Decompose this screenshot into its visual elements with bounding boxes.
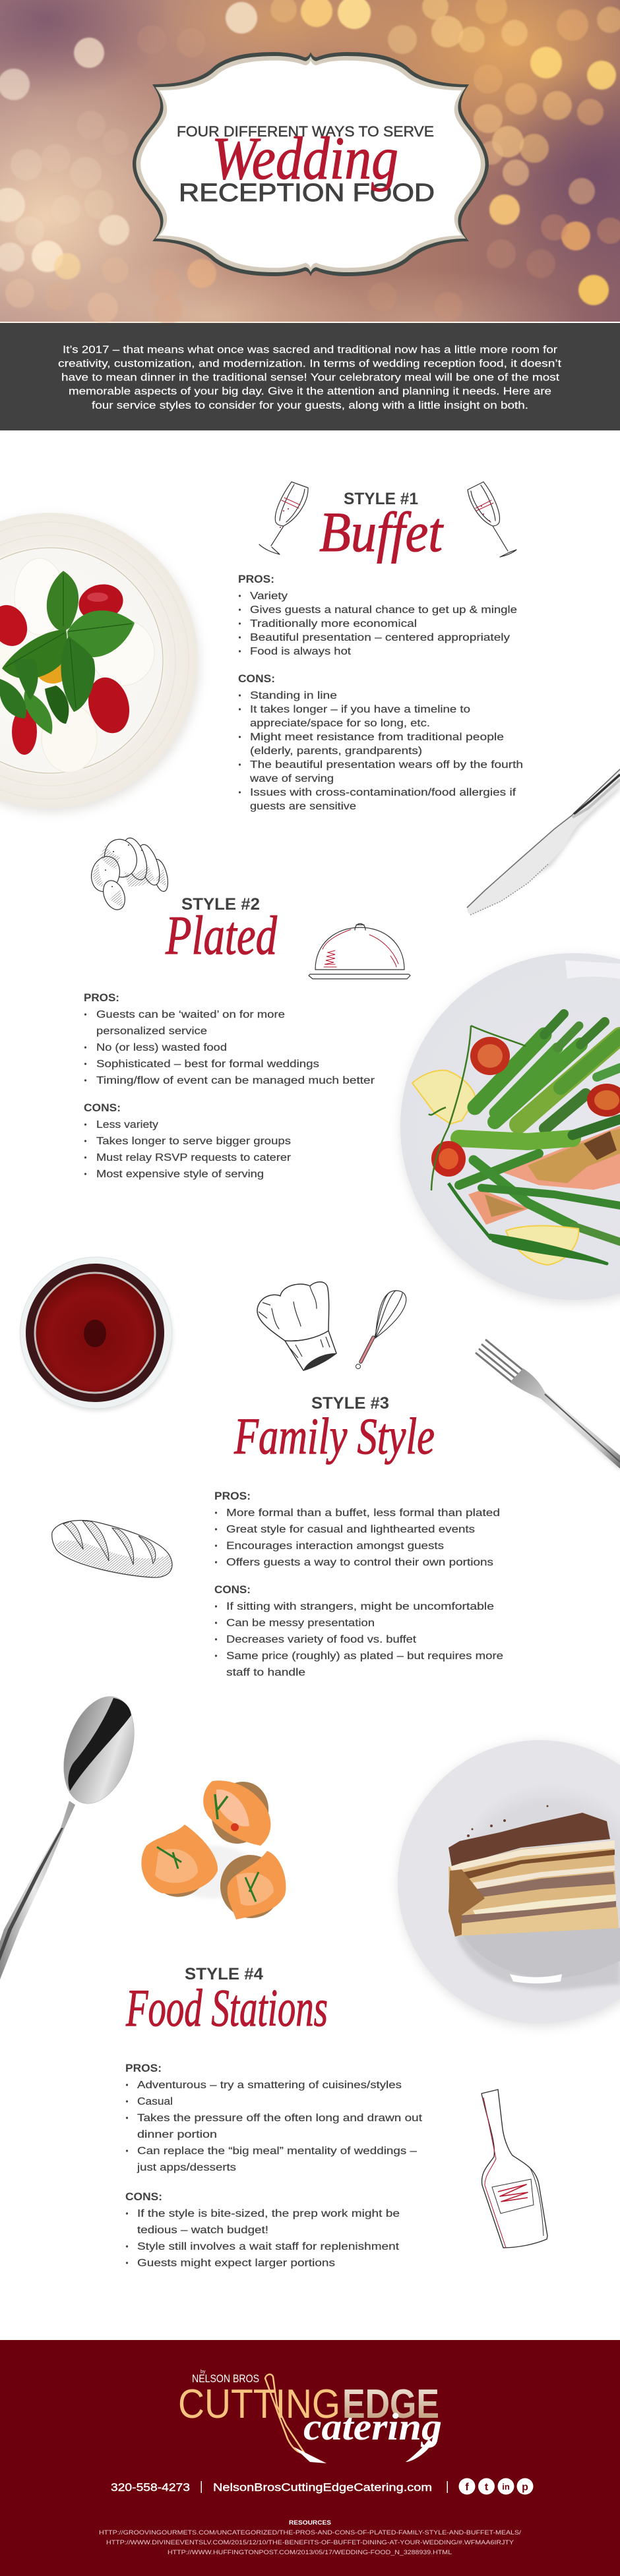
- image: fork: [476, 1340, 620, 1471]
- image: salmon canapes: [141, 1772, 286, 1923]
- icons: social media: t: [485, 2482, 489, 2493]
- heading: style 3 family style: STYLE #3: [311, 1394, 389, 1413]
- text block: style 3 pros and cons: Offers guests a way to control their own portions: [226, 1557, 493, 1568]
- contact line: NelsonBrosCuttingEdgeCatering.com: [213, 2481, 432, 2494]
- text block: style 2 pros and cons: CONS:: [84, 1102, 121, 1114]
- logo: Nelson Bros Cutting Edge Catering: by: [201, 2370, 206, 2374]
- text block: style 4 pros and cons: Guests might expect larger portions: [137, 2258, 335, 2269]
- icon: bread loaf: [52, 1520, 172, 1577]
- text block: style 2 pros and cons: PROS:: [84, 992, 119, 1004]
- text block: style 1 pros and cons: Standing in line: [250, 690, 337, 701]
- text block: style 1 pros and cons: Variety: [250, 591, 288, 602]
- text block: style 3 pros and cons: CONS:: [214, 1584, 251, 1596]
- text block: style 2 pros and cons: personalized service: [96, 1026, 207, 1037]
- text block: style 1 pros and cons: The beautiful presentation wears off by the fourth: [250, 759, 523, 771]
- text block: style 1 pros and cons: It takes longer – if you have a timeline to: [250, 704, 470, 715]
- icon: left champagne glass: [259, 482, 308, 554]
- text block: style 2 pros and cons: Sophisticated – best for formal weddings: [96, 1059, 319, 1070]
- logo: Nelson Bros Cutting Edge Catering: NELSON BROS: [192, 2372, 259, 2385]
- heading: style 3 family style: Family Style: [233, 1407, 435, 1465]
- asparagus: [459, 1014, 620, 1242]
- text block: style 4 pros and cons: dinner portion: [137, 2129, 217, 2140]
- icons: social media: p: [522, 2482, 528, 2493]
- icons: social media: f: [465, 2482, 469, 2493]
- logo: Nelson Bros Cutting Edge Catering: catering: [303, 2405, 442, 2448]
- text block: style 2 pros and cons: Must relay RSVP requests to caterer: [96, 1152, 291, 1163]
- image: red wine glass from above: [20, 1257, 173, 1411]
- text block: style 1 pros and cons: (elderly, parents, grandparents): [250, 746, 422, 757]
- icons: social media: [459, 2478, 533, 2494]
- heading: style 4 food stations: Food Stations: [125, 1979, 328, 2037]
- text block: style 1 pros and cons: appreciate/space for so long, etc.: [250, 718, 430, 729]
- text block: style 1 pros and cons: Might meet resistance from traditional people: [250, 732, 504, 743]
- logo: Nelson Bros Cutting Edge Catering: EDGE: [342, 2382, 439, 2427]
- text block: resources: HTTP://GROOVINGOURMETS.COM/UNCATEGORIZED/THE-PROS-AND-CONS-OF-PLATED-FAMILY-STYLE-AND-BUFFET-MEALS/: [99, 2529, 522, 2536]
- text block: style 4 pros and cons: [125, 2063, 423, 2269]
- text block: resources: RESOURCES: [289, 2519, 331, 2526]
- text block: style 3 pros and cons: Can be messy presentation: [226, 1618, 375, 1629]
- frame: scalloped title plaque: [133, 52, 489, 276]
- image: caprese plate: [0, 513, 199, 812]
- heading: style 2 plated: [165, 895, 278, 966]
- title: heading text: FOUR DIFFERENT WAYS TO SERVE: [177, 123, 434, 140]
- text block: style 1 pros and cons: Traditionally more economical: [250, 618, 417, 629]
- text block: style 3 pros and cons: Great style for casual and lighthearted events: [226, 1524, 475, 1535]
- text block: style 1 pros and cons: guests are sensitive: [250, 801, 356, 812]
- image: spoon: [0, 1687, 147, 1979]
- text block: style 2 pros and cons: Timing/flow of event can be managed much better: [96, 1075, 375, 1086]
- icon: bottle: [481, 2090, 547, 2248]
- heading: style 1 buffet: STYLE #1: [344, 490, 418, 508]
- bokeh lights: [0, 0, 620, 324]
- text block: resources: [99, 2519, 522, 2556]
- title: heading text: RECEPTION FOOD: [179, 179, 435, 207]
- panel: hero bokeh banner: [0, 0, 620, 389]
- text block: style 3 pros and cons: staff to handle: [226, 1667, 305, 1678]
- contact line: [111, 2481, 448, 2494]
- text block: style 4 pros and cons: Adventurous – try a smattering of cuisines/styles: [137, 2080, 402, 2091]
- text block: resources: HTTP://WWW.HUFFINGTONPOST.COM/2013/05/17/WEDDING-FOOD_N_3288939.HTML: [168, 2549, 452, 2556]
- logo: Nelson Bros Cutting Edge Catering: CUTTING: [178, 2382, 340, 2427]
- heading: style 2 plated: STYLE #2: [181, 895, 260, 914]
- text block: style 3 pros and cons: More formal than a buffet, less formal than plated: [226, 1508, 500, 1519]
- image: cake slice plate: [398, 1740, 620, 2027]
- text block: style 4 pros and cons: CONS:: [125, 2191, 162, 2203]
- text block: style 2 pros and cons: Takes longer to serve bigger groups: [96, 1136, 291, 1147]
- text block: style 3 pros and cons: Encourages interaction amongst guests: [226, 1540, 444, 1552]
- text block: style 1 pros and cons: Gives guests a natural chance to get up & mingle: [250, 604, 517, 616]
- text block: style 4 pros and cons: just apps/desserts: [137, 2162, 236, 2173]
- icons: social media: in: [502, 2482, 510, 2492]
- text block: style 1 pros and cons: Food is always hot: [250, 646, 352, 657]
- arugula and lemon: [429, 1026, 607, 1265]
- text block: style 3 pros and cons: Same price (roughly) as plated – but requires more: [226, 1651, 503, 1662]
- panel: intro text band: have to mean dinner in the traditional sense! Your celebratory meal will be one of the most: [61, 372, 560, 384]
- text block: style 4 pros and cons: Takes the pressure off the often long and drawn out: [137, 2113, 423, 2124]
- text block: style 1 pros and cons: CONS:: [238, 673, 275, 685]
- panel: intro text band: creativity, customization, and modernization. In terms of wedding reception food, it doesn’t: [58, 359, 562, 369]
- icon: croissant sketch: [88, 835, 171, 913]
- text block: style 4 pros and cons: Can replace the “big meal” mentality of weddings –: [137, 2146, 417, 2157]
- text block: style 1 pros and cons: Issues with cross-contamination/food allergies if: [250, 787, 516, 798]
- text block: style 4 pros and cons: Casual: [137, 2096, 173, 2107]
- title: heading text: Wedding: [212, 125, 398, 192]
- panel: intro text band: [0, 323, 620, 430]
- text block: style 3 pros and cons: PROS:: [214, 1490, 251, 1502]
- text block: style 1 pros and cons: [238, 573, 523, 812]
- text block: style 2 pros and cons: Most expensive style of serving: [96, 1169, 264, 1180]
- image: salmon and asparagus plate: [400, 953, 620, 1303]
- heading: style 4 food stations: STYLE #4: [185, 1965, 263, 1983]
- text block: style 2 pros and cons: [84, 992, 375, 1180]
- logo: Nelson Bros Cutting Edge Catering: [178, 2370, 442, 2463]
- heading: style 2 plated: Plated: [165, 905, 278, 966]
- image: table knife: [467, 769, 620, 918]
- icon: whisk: [356, 1291, 406, 1368]
- icon: right champagne glass: [468, 482, 516, 557]
- text block: style 3 pros and cons: Decreases variety of food vs. buffet: [226, 1634, 417, 1645]
- text block: resources: HTTP://WWW.DIVINEEVENTSLV.COM/2015/12/10/THE-BENEFITS-OF-BUFFET-DINING-AT-YOUR-WEDDING/#.WFMAA6IRJTY: [106, 2539, 514, 2546]
- panel: footer: [0, 2340, 620, 2576]
- icon: chef hat: [257, 1282, 336, 1370]
- text block: style 2 pros and cons: Guests can be ‘waited’ on for more: [96, 1009, 285, 1020]
- text block: style 3 pros and cons: [214, 1490, 503, 1678]
- text block: style 2 pros and cons: No (or less) wasted food: [96, 1042, 227, 1053]
- text block: style 4 pros and cons: Style still involves a wait staff for replenishment: [137, 2241, 400, 2252]
- panel: intro text band: four service styles to consider for your guests, along with a little insight on both.: [92, 400, 528, 411]
- panel: intro text band: It’s 2017 – that means what once was sacred and traditional now has a little more room for: [63, 344, 558, 356]
- text block: style 2 pros and cons: Less variety: [96, 1119, 158, 1130]
- panel: intro text band: memorable aspects of your big day. Give it the attention and planning it needs. Here are: [69, 386, 551, 397]
- tomatoes: [470, 1037, 510, 1075]
- text block: style 1 pros and cons: PROS:: [238, 573, 274, 585]
- text block: style 1 pros and cons: Beautiful presentation – centered appropriately: [250, 632, 510, 643]
- text block: style 1 pros and cons: wave of serving: [249, 773, 334, 784]
- text block: style 4 pros and cons: PROS:: [125, 2063, 162, 2074]
- icon: serving cloche: [309, 923, 410, 979]
- lemon wedge: [412, 1070, 476, 1124]
- heading: style 1 buffet: Buffet: [319, 500, 444, 564]
- title: heading text: [177, 123, 435, 207]
- text block: style 3 pros and cons: If sitting with strangers, might be uncomfortable: [226, 1601, 494, 1612]
- text block: style 4 pros and cons: If the style is bite-sized, the prep work might be: [137, 2208, 400, 2219]
- heading: style 4 food stations: [125, 1965, 328, 2037]
- salmon fillets: [503, 1126, 620, 1190]
- contact line: 320-558-4273: [111, 2481, 190, 2494]
- heading: style 3 family style: [233, 1394, 435, 1465]
- text block: style 4 pros and cons: tedious – watch budget!: [137, 2225, 268, 2236]
